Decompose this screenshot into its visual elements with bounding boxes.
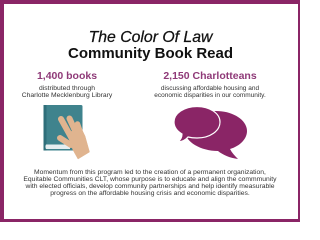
body paragraph: Equitable Communities CLT, whose purpose is to educate and align the commmunity: [23, 176, 277, 183]
icon: book with hand: [44, 105, 90, 160]
icon: speech bubbles: [174, 107, 247, 159]
text: books description: distributed through: [39, 84, 95, 92]
title: [68, 29, 233, 62]
text: Charlotteans description: discussing affordable housing and: [161, 84, 259, 92]
body paragraph: Momentum from this program led to the creation of a permanent organization,: [34, 169, 266, 176]
stat heading: Charlotteans: 2,150 Charlotteans: [163, 70, 257, 82]
text: Charlotteans description: [154, 84, 266, 98]
text: books description: Charlotte Mecklenburg Library: [22, 92, 112, 98]
text: books description: [22, 84, 112, 98]
title: The Color Of Law: [89, 29, 212, 46]
body paragraph: with elected officials, develop community partnerships and help identify measurable: [25, 183, 275, 190]
stat heading: books: 1,400 books: [37, 70, 97, 82]
body paragraph: [23, 169, 277, 197]
title: Community Book Read: [68, 44, 233, 62]
text: Charlotteans description: economic disparities in our community.: [154, 92, 266, 98]
body paragraph: progress on the affordable housing crisis and economic disparities.: [50, 190, 250, 197]
